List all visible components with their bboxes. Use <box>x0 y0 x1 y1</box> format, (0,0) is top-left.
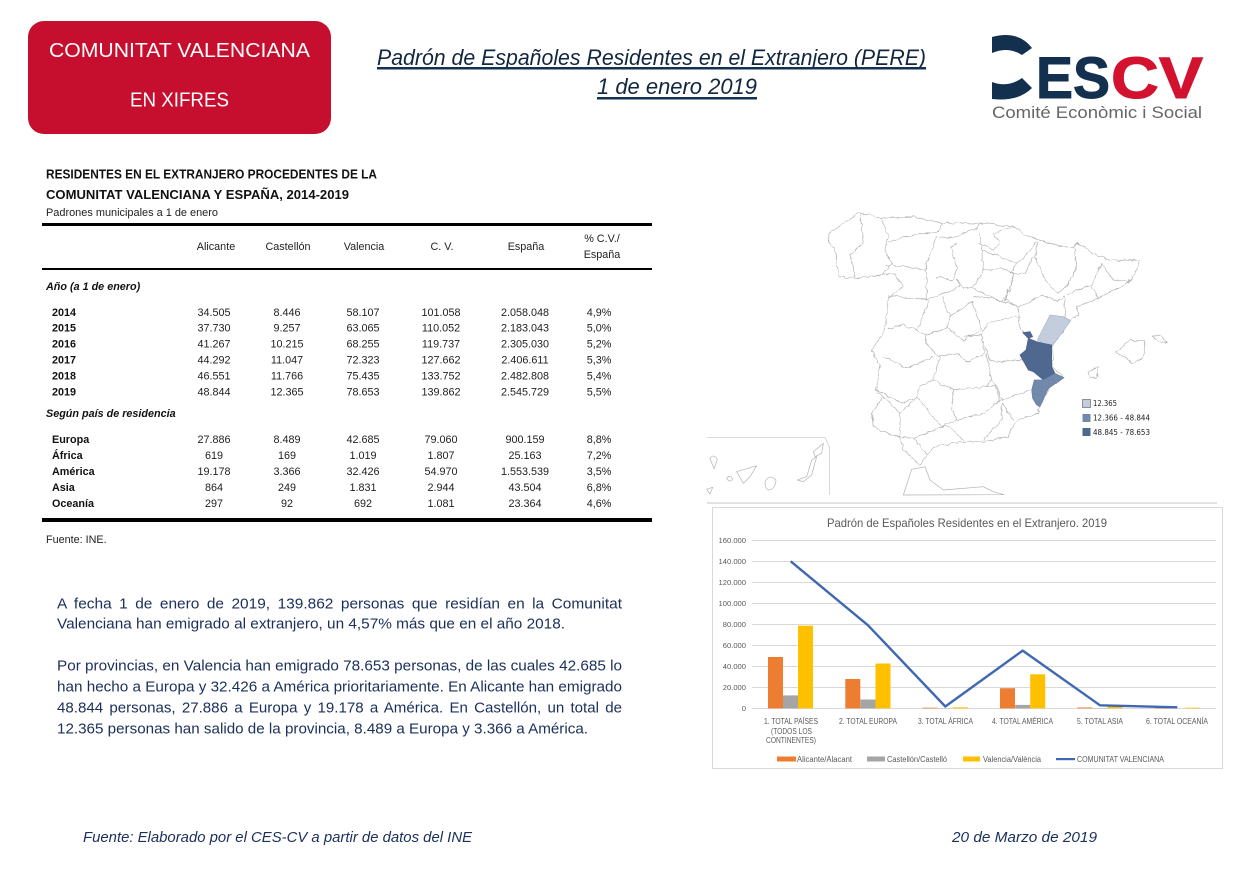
chart legend: Castellón/Castelló <box>887 755 948 764</box>
year rows: 8.446 <box>273 307 301 319</box>
text block: summary: Por provincias, en Valencia han emigrado 78.653 personas, de las cuales 42.685 lo <box>57 658 622 674</box>
table header row: Alicante <box>197 241 235 253</box>
year row labels <box>52 307 76 398</box>
continent row labels: África <box>52 449 84 462</box>
year rows: 2.183.043 <box>501 322 549 334</box>
continent rows: 54.970 <box>424 466 458 478</box>
y axis labels: 60.000 <box>723 641 746 650</box>
year rows: 2.545.729 <box>501 386 549 398</box>
continent rows: 692 <box>354 498 372 510</box>
year row labels: 2018 <box>52 370 76 382</box>
year rows: 5,4% <box>587 370 612 382</box>
continent row labels: América <box>52 466 96 478</box>
province: Alicante <box>1032 373 1064 407</box>
text block: summary: 48.844 personas, 27.886 a Europa y 19.178 a América. En Castellón, un total de <box>57 700 622 716</box>
continent rows: 92 <box>281 498 293 510</box>
year rows: 9.257 <box>273 322 301 334</box>
year rows: 78.653 <box>346 386 380 398</box>
continent row labels: Europa <box>52 434 90 446</box>
category labels <box>764 717 1209 745</box>
chart: Padrón de Españoles Residentes en el Extranjero 2019 <box>707 502 1222 768</box>
continent rows: 25.163 <box>508 450 542 462</box>
y axis labels: 40.000 <box>723 662 746 671</box>
map legend <box>1082 399 1150 437</box>
year row labels: 2015 <box>52 322 76 334</box>
data table <box>42 223 652 522</box>
continent rows: 43.504 <box>508 482 542 494</box>
y axis labels: 140.000 <box>719 557 746 566</box>
table source: Fuente: INE. <box>46 534 107 546</box>
year rows: 48.844 <box>197 386 231 398</box>
map legend: 48.845 - 78.653 <box>1093 428 1150 437</box>
year rows: 44.292 <box>197 354 231 366</box>
y axis labels: 80.000 <box>723 620 746 629</box>
logo: CES-CV: ES <box>1036 46 1110 111</box>
continent rows: 864 <box>205 482 223 494</box>
year rows: 68.255 <box>346 338 380 350</box>
year rows: 41.267 <box>197 338 231 350</box>
text block: summary: 12.365 personas han salido de la provincia, 8.489 a Europa y 3.366 a América. <box>57 722 588 738</box>
year rows: 63.065 <box>346 322 380 334</box>
year rows: 11.766 <box>271 370 303 382</box>
footer source: Fuente: Elaborado por el CES-CV a partir de datos del INE <box>83 830 472 846</box>
continent rows: 169 <box>278 450 296 462</box>
chart legend: Alicante/Alacant <box>797 755 853 764</box>
continent rows: 2.944 <box>427 482 455 494</box>
table header row: % C.V./ <box>584 233 620 245</box>
continent rows: 249 <box>278 482 296 494</box>
text block: summary <box>57 596 622 738</box>
year rows: 110.052 <box>422 322 460 334</box>
continent rows: 32.426 <box>346 466 380 478</box>
map legend: 12.365 <box>1093 399 1117 408</box>
continent rows: 1.807 <box>427 450 455 462</box>
category labels: 3. TOTAL ÁFRICA <box>918 717 974 726</box>
continent rows: 3.366 <box>273 466 301 478</box>
table header row: España <box>584 249 620 261</box>
chart legend <box>777 755 1165 764</box>
title: Padrón de Españoles Residentes en el Extranjero (PERE) <box>377 45 926 70</box>
continent rows: 900.159 <box>505 434 545 446</box>
year rows: 11.047 <box>271 354 303 366</box>
year row labels: 2016 <box>52 338 76 350</box>
title: 1 de enero 2019 <box>597 74 757 99</box>
map legend: 12.366 - 48.844 <box>1093 414 1150 422</box>
year rows: 5,2% <box>587 338 612 350</box>
continent row labels: Oceanía <box>52 498 95 510</box>
year rows: 37.730 <box>197 322 231 334</box>
category labels: CONTINENTES) <box>766 736 816 745</box>
continent rows: 8,8% <box>587 434 612 446</box>
y axis labels: 120.000 <box>719 578 746 587</box>
continent row labels <box>52 434 96 510</box>
continent rows <box>197 434 612 510</box>
year rows: 139.862 <box>421 386 461 398</box>
year rows: 2.406.611 <box>501 354 549 366</box>
y axis labels: 20.000 <box>723 683 746 692</box>
year rows: 119.737 <box>422 338 460 350</box>
continent rows: 1.019 <box>349 450 377 462</box>
table heading: RESIDENTES EN EL EXTRANJERO PROCEDENTES DE LA <box>46 166 377 182</box>
province: Valencia <box>1020 338 1055 380</box>
continent rows: 619 <box>205 450 223 462</box>
continent rows: 23.364 <box>508 498 542 510</box>
Ceuta and Melilla inset <box>903 467 1004 495</box>
continent rows: 8.489 <box>273 434 301 446</box>
badge: Comunitat Valenciana en xifres: EN XIFRES <box>130 88 229 112</box>
year rows: 2.482.808 <box>501 370 549 382</box>
table heading <box>46 166 377 219</box>
text block: summary: han hecho a Europa y 32.426 a América prioritariamente. En Alicante han emigrado <box>57 680 622 696</box>
country outline and province borders <box>828 214 1166 465</box>
year row labels: 2017 <box>52 354 76 366</box>
line: Comunitat Valenciana <box>791 561 1177 707</box>
y axis labels <box>719 536 746 713</box>
bars: Valencia <box>798 626 1200 708</box>
chart legend: Valencia/València <box>983 755 1042 764</box>
year rows: 46.551 <box>197 370 231 382</box>
map of Spain by province <box>707 214 1166 495</box>
y axis labels: 0 <box>742 704 746 713</box>
year rows: 58.107 <box>346 307 380 319</box>
year rows: 2.305.030 <box>501 338 549 350</box>
continent rows: 1.831 <box>349 482 377 494</box>
section label: year: Año (a 1 de enero) <box>45 281 141 293</box>
continent rows: 4,6% <box>587 498 612 510</box>
year rows: 75.435 <box>346 370 380 382</box>
year rows: 127.662 <box>421 354 461 366</box>
bars: Alicante <box>768 657 1170 708</box>
continent rows: 7,2% <box>587 450 612 462</box>
logo: CES-CV <box>992 35 1203 122</box>
year row labels: 2014 <box>52 307 76 319</box>
continent rows: 297 <box>205 498 223 510</box>
category labels: 6. TOTAL OCEANÍA <box>1146 717 1209 726</box>
table heading: COMUNITAT VALENCIANA Y ESPAÑA, 2014-2019 <box>46 187 349 202</box>
year rows <box>197 307 612 398</box>
year rows: 5,3% <box>587 354 612 366</box>
table header row: Castellón <box>265 241 311 253</box>
table header row: C. V. <box>430 241 454 253</box>
year rows: 34.505 <box>197 307 231 319</box>
continent rows: 1.553.539 <box>501 466 549 478</box>
year rows: 4,9% <box>587 307 612 319</box>
year rows: 2.058.048 <box>501 307 549 319</box>
year rows: 10.215 <box>270 338 304 350</box>
Canary Islands inset <box>707 437 829 495</box>
year rows: 72.323 <box>346 354 380 366</box>
category labels: 2. TOTAL EUROPA <box>839 717 898 726</box>
table heading: Padrones municipales a 1 de enero <box>46 207 218 219</box>
badge: Comunitat Valenciana en xifres: COMUNITAT VALENCIANA <box>49 39 310 62</box>
text block: summary: A fecha 1 de enero de 2019, 139.862 personas que residían en la Comunitat <box>57 596 622 612</box>
y axis labels: 160.000 <box>719 536 746 545</box>
category labels: 1. TOTAL PAÍSES <box>764 717 818 726</box>
year row labels: 2019 <box>52 386 76 398</box>
text block: summary: Valenciana han emigrado al extranjero, un 4,57% más que en el año 2018. <box>57 616 565 632</box>
continent rows: 27.886 <box>197 434 231 446</box>
year rows: 5,0% <box>587 322 612 334</box>
continent rows: 19.178 <box>197 466 231 478</box>
year rows: 12.365 <box>270 386 304 398</box>
continent rows: 42.685 <box>346 434 380 446</box>
category labels: 4. TOTAL AMÉRICA <box>992 717 1054 726</box>
footer date: 20 de Marzo de 2019 <box>951 830 1097 846</box>
table header row <box>197 233 620 261</box>
section label: country: Según país de residencia <box>46 408 176 420</box>
year rows: 101.058 <box>421 307 461 319</box>
continent rows: 3,5% <box>587 466 612 478</box>
province: Valencia enclave <box>1023 332 1033 338</box>
chart legend: COMUNITAT VALENCIANA <box>1077 755 1165 764</box>
year rows: 133.752 <box>421 370 461 382</box>
category labels: (TODOS LOS <box>771 727 812 736</box>
badge: Comunitat Valenciana en xifres <box>28 21 331 134</box>
table header row: Valencia <box>344 241 384 253</box>
bars: Castellón <box>783 695 1108 708</box>
continent row labels: Asia <box>52 482 76 494</box>
year rows: 5,5% <box>587 386 612 398</box>
title <box>377 45 926 100</box>
continent rows: 6,8% <box>587 482 612 494</box>
logo: CES-CV: CV <box>1111 46 1203 111</box>
logo: CES-CV: Comité Econòmic i Social <box>992 103 1202 122</box>
table header row: España <box>508 241 544 253</box>
category labels: 5. TOTAL ASIA <box>1077 717 1124 726</box>
province: Castellón <box>1037 315 1071 345</box>
y axis labels: 100.000 <box>719 599 746 608</box>
continent rows: 1.081 <box>427 498 455 510</box>
continent rows: 79.060 <box>424 434 458 446</box>
chart title: Padrón de Españoles Residentes en el Extranjero. 2019 <box>827 516 1107 530</box>
